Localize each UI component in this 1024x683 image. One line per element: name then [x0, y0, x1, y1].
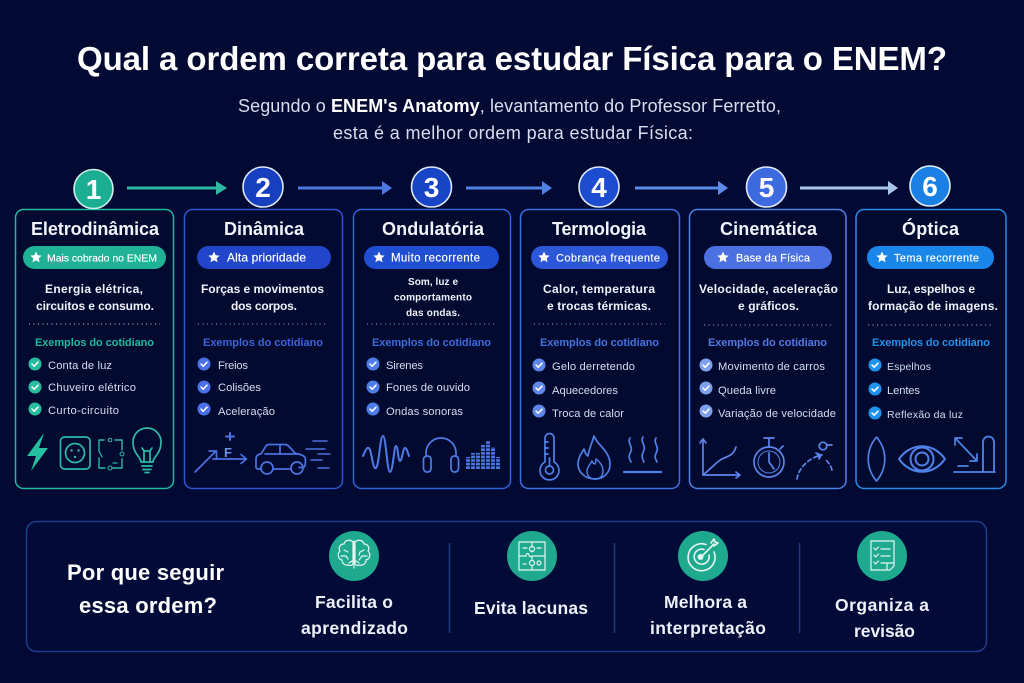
description: comportamento	[394, 292, 472, 304]
example list: Aquecedores	[552, 385, 618, 397]
example list: Lentes	[887, 385, 920, 397]
example list: Freios	[218, 360, 248, 372]
example list	[28, 358, 136, 417]
badge: priority: Muito recorrente	[391, 252, 480, 264]
icon: brain	[329, 531, 379, 581]
number badge 2	[243, 167, 283, 207]
example list: Curto-circuito	[48, 405, 119, 417]
panel: Óptica	[856, 166, 1006, 488]
description	[543, 282, 655, 313]
badge: priority	[364, 246, 499, 269]
arrow: step 2 to 3	[298, 181, 392, 195]
description: Som, luz e	[408, 277, 458, 288]
icons: sound waves	[363, 436, 498, 472]
panel: Eletrodinâmica	[16, 170, 174, 488]
example list: Aceleração	[218, 406, 275, 418]
description	[868, 282, 998, 313]
arrow: step 1 to 2	[127, 181, 227, 195]
benefit: facilita o aprendizado	[301, 531, 408, 638]
heading: Ondulatória	[382, 219, 485, 239]
number badge 6: 6	[922, 171, 938, 202]
panel: Termologia	[520, 167, 680, 488]
benefit: evita lacunas: Evita lacunas	[474, 598, 588, 618]
description: dos corpos.	[231, 299, 297, 313]
heading: Eletrodinâmica	[31, 219, 160, 239]
example list: Gelo derretendo	[552, 361, 635, 373]
benefit: facilita o aprendizado: Facilita o	[315, 592, 393, 612]
icons: force and car: F	[224, 445, 232, 460]
number badge 1	[74, 170, 113, 208]
subtitle	[238, 96, 781, 143]
number badge 4: 4	[591, 172, 607, 203]
description	[699, 282, 838, 313]
panel: Dinâmica	[184, 167, 342, 488]
subtitle: Segundo o ENEM's Anatomy, levantamento do Professor Ferretto,	[238, 96, 781, 116]
benefit: melhora a interpretação: Melhora a	[664, 592, 747, 612]
icons: force and car	[195, 433, 330, 474]
number badge 1: 1	[86, 174, 101, 205]
icon: target	[678, 531, 728, 581]
description: Forças e movimentos	[201, 282, 324, 296]
example list: Movimento de carros	[718, 361, 825, 373]
example list	[700, 358, 836, 420]
heading: Óptica	[902, 218, 960, 239]
badge: priority: Cobrança frequente	[556, 252, 660, 264]
description: Velocidade, aceleração	[699, 282, 838, 296]
badge: priority: Mais cobrado no ENEM	[47, 252, 157, 264]
description: circuitos e consumo.	[36, 299, 154, 313]
benefit: melhora a interpretação: interpretação	[650, 618, 766, 638]
badge: priority: Alta prioridade	[227, 250, 306, 264]
heading: Termologia	[552, 219, 647, 239]
number badge 3	[412, 167, 452, 207]
heading: Dinâmica	[224, 219, 305, 239]
arrow: step 4 to 5	[635, 181, 728, 195]
panel heading	[67, 560, 224, 618]
benefit: melhora a interpretação	[650, 531, 766, 638]
examples heading: Exemplos do cotidiano	[540, 337, 659, 349]
benefit: organiza a revisão: Organiza a	[835, 595, 929, 615]
description	[201, 282, 324, 313]
description: e gráficos.	[738, 299, 799, 313]
description: Luz, espelhos e	[887, 282, 975, 296]
badge: priority: Base da Física	[736, 252, 811, 264]
icons: optics	[868, 437, 995, 481]
benefit: organiza a revisão: revisão	[854, 621, 915, 641]
badge: priority	[531, 246, 668, 269]
badge: priority	[23, 246, 166, 269]
description	[394, 277, 472, 319]
examples heading: Exemplos do cotidiano	[872, 337, 990, 349]
number badge 5	[746, 167, 786, 207]
example list: Reflexão da luz	[887, 409, 963, 421]
panel: why follow this order	[26, 522, 986, 652]
description: Calor, temperatura	[543, 282, 655, 296]
benefit: evita lacunas	[474, 531, 588, 618]
number badge 2: 2	[255, 172, 271, 203]
example list	[366, 358, 470, 418]
arrow: step 5 to 6	[800, 181, 898, 195]
icons: electricity	[27, 428, 161, 472]
examples heading: Exemplos do cotidiano	[708, 337, 827, 349]
number badge 5: 5	[759, 172, 774, 203]
number badge 6	[910, 166, 950, 206]
icon: puzzle	[507, 531, 557, 581]
example list: Espelhos	[887, 361, 931, 373]
benefit: facilita o aprendizado: aprendizado	[301, 618, 408, 638]
example list: Variação de velocidade	[718, 408, 836, 420]
example list: Troca de calor	[552, 408, 624, 420]
examples heading: Exemplos do cotidiano	[203, 337, 323, 349]
example list: Conta de luz	[48, 360, 112, 372]
example list: Chuveiro elétrico	[48, 382, 136, 394]
description: formação de imagens.	[868, 299, 998, 313]
panel heading: essa ordem?	[79, 593, 217, 618]
example list	[198, 358, 275, 418]
icons: motion	[700, 438, 832, 479]
description: e trocas térmicas.	[547, 299, 651, 313]
panel heading: Por que seguir	[67, 560, 224, 585]
benefit: organiza a revisão	[835, 531, 929, 641]
example list	[868, 358, 963, 421]
panel: Ondulatória	[354, 167, 510, 488]
description: Energia elétrica,	[45, 282, 143, 296]
subtitle: esta é a melhor ordem para estudar Física:	[333, 123, 693, 143]
title: Qual a ordem correta para estudar Física para o ENEM?	[77, 40, 947, 77]
example list: Fones de ouvido	[386, 382, 470, 394]
example list: Ondas sonoras	[386, 406, 463, 418]
number badge 3: 3	[424, 172, 439, 203]
icons: heat	[540, 434, 661, 480]
examples heading: Exemplos do cotidiano	[372, 337, 491, 349]
examples heading: Exemplos do cotidiano	[35, 337, 154, 349]
badge: priority	[197, 246, 331, 269]
heading: Cinemática	[720, 219, 818, 239]
example list: Colisões	[218, 382, 261, 394]
example list: Queda livre	[718, 385, 776, 397]
badge: priority	[867, 246, 994, 269]
example list	[532, 358, 635, 420]
example list: Sirenes	[386, 360, 423, 372]
description	[36, 282, 154, 313]
arrow: step 3 to 4	[466, 181, 552, 195]
number badge 4	[579, 167, 619, 207]
badge: priority	[704, 246, 832, 269]
badge: priority: Tema recorrente	[894, 252, 979, 264]
panel: Cinemática	[690, 167, 846, 488]
icon: checklist	[857, 531, 907, 581]
description: das ondas.	[406, 308, 460, 319]
